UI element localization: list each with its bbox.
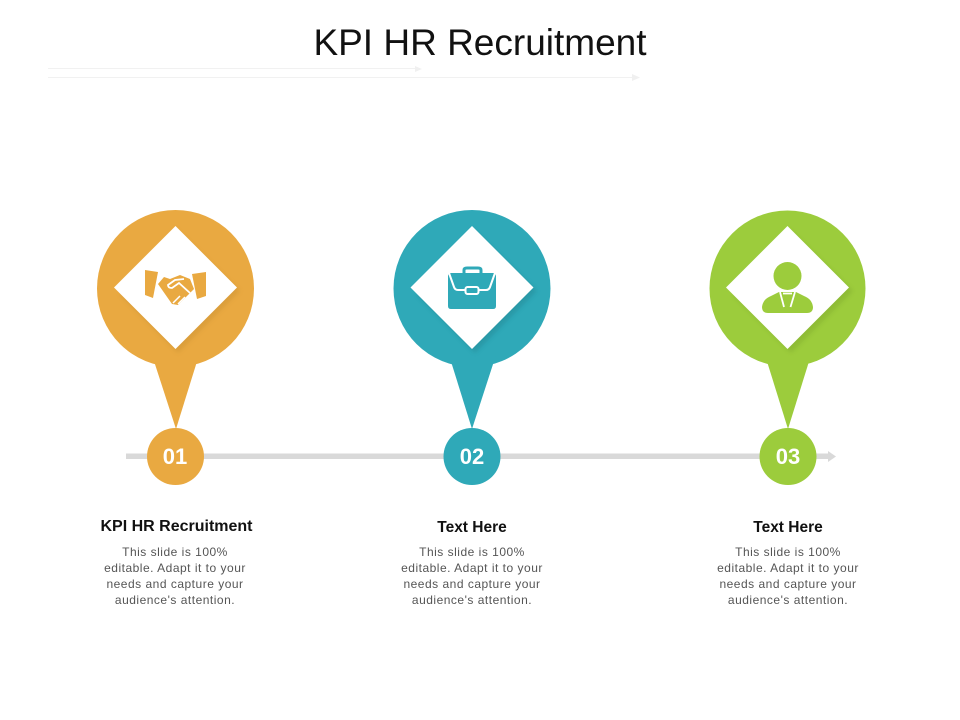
text block 1: audience's attention.	[115, 593, 235, 607]
text block 3: audience's attention.	[728, 593, 848, 607]
marker 1	[97, 210, 254, 429]
decorative arrow lower	[48, 74, 640, 81]
text block 1: editable. Adapt it to your	[104, 561, 246, 575]
decorative arrow upper	[48, 66, 422, 72]
badge 03: 03	[776, 444, 800, 469]
title: KPI HR Recruitment	[313, 22, 647, 63]
diamond panel: orange	[114, 226, 240, 353]
text block 3: This slide is 100%	[735, 545, 841, 559]
pin: green	[710, 210, 866, 429]
text block 2: editable. Adapt it to your	[401, 561, 543, 575]
heading 1: KPI HR Recruitment	[100, 518, 253, 535]
text block 2	[401, 545, 543, 607]
badge 01	[147, 428, 204, 485]
diamond panel: green	[726, 226, 853, 353]
heading 2: Text Here	[437, 519, 507, 536]
pin: orange	[97, 210, 254, 429]
text block 3	[717, 545, 859, 607]
badge 01: 01	[163, 444, 187, 469]
text block 1	[104, 545, 246, 607]
diamond panel: teal	[410, 226, 537, 353]
icon: briefcase	[448, 268, 496, 309]
icon: businessman	[762, 262, 813, 313]
marker 2	[394, 210, 550, 429]
pin: teal	[394, 210, 550, 429]
badge 03	[760, 428, 816, 485]
text block 1: needs and capture your	[106, 577, 244, 591]
badge 02	[444, 428, 500, 485]
marker 3	[710, 210, 866, 429]
text block 2: This slide is 100%	[419, 545, 525, 559]
text block 3: needs and capture your	[719, 577, 857, 591]
text block 2: needs and capture your	[403, 577, 541, 591]
heading 3: Text Here	[753, 519, 823, 536]
badge 02: 02	[460, 444, 484, 469]
text block 1: This slide is 100%	[122, 545, 228, 559]
icon: handshake	[145, 270, 206, 305]
timeline arrow	[126, 451, 836, 462]
text block 2: audience's attention.	[412, 593, 532, 607]
text block 3: editable. Adapt it to your	[717, 561, 859, 575]
